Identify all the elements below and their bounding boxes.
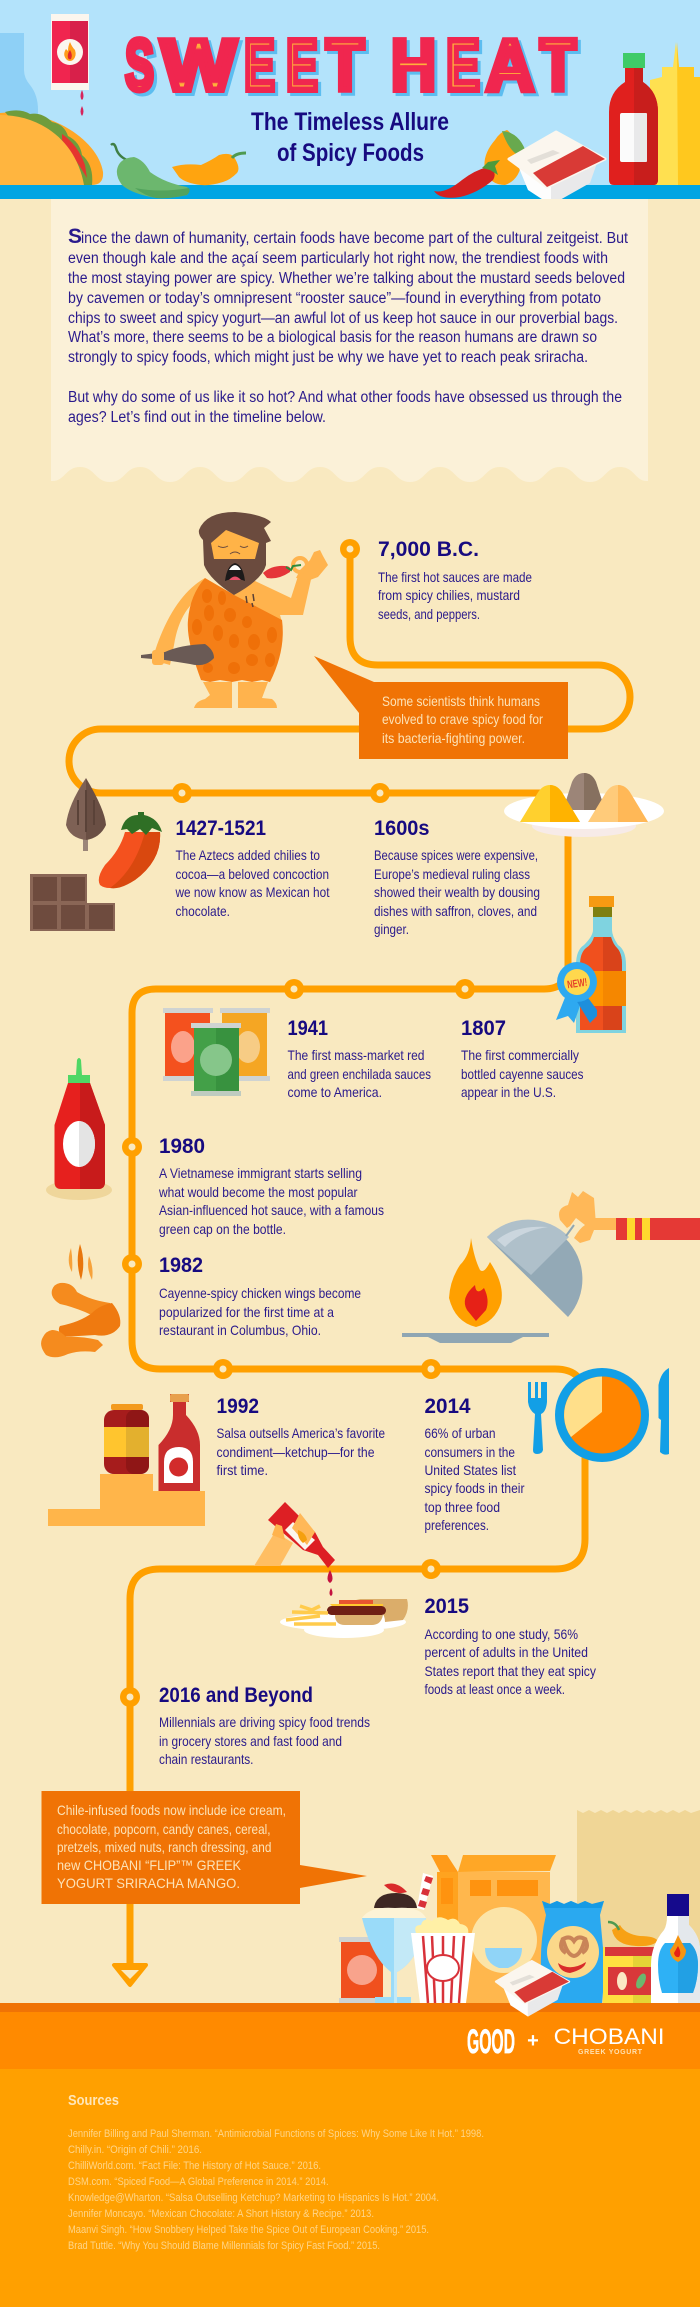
title: E — [247, 29, 278, 109]
icon: salsa and ketchup on steps — [48, 1394, 205, 1526]
icon: cocoa seed — [66, 778, 106, 851]
text block: 1980: Asian-influenced hot sauce, with a famous — [159, 1202, 384, 1218]
callout: chile-infused foods: chocolate, popcorn, candy canes, cereal, — [57, 1821, 270, 1837]
text block: 1992 — [216, 1395, 385, 1478]
sources — [68, 2092, 484, 2252]
text block: 1807: bottled cayenne sauces — [461, 1066, 584, 1082]
text block: 7,000 B.C.: 7,000 B.C. — [378, 538, 479, 561]
text block: 2015: percent of adults in the United — [424, 1644, 588, 1660]
sources: Sources — [68, 2092, 119, 2109]
title: E — [244, 26, 275, 106]
text block: 1980: A Vietnamese immigrant starts selling — [159, 1165, 362, 1181]
callout: bacteria-fighting: evolved to crave spicy food for — [382, 711, 543, 727]
sources: Maanvi Singh. “How Snobbery Helped Take the Spice Out of European Cooking.” 2015. — [68, 2224, 429, 2236]
title: E — [289, 29, 321, 109]
text block: 1980: green cap on the bottle. — [159, 1221, 286, 1237]
text block: 1941 — [288, 1017, 431, 1100]
icon: peanut jar with pepper — [603, 1922, 658, 2003]
callout: chile-infused foods — [42, 1791, 367, 1904]
text block: 1980: 1980 — [159, 1135, 205, 1158]
text block: 1427-1521: chocolate. — [176, 903, 230, 919]
text block: 1992: condiment—ketchup—for the — [216, 1444, 375, 1460]
sources: Chilly.in. “Origin of Chili.” 2016. — [68, 2144, 202, 2156]
callout: bacteria-fighting: Some scientists think humans — [382, 693, 540, 709]
text block: 2015: 2015 — [424, 1595, 469, 1618]
intro text: by cavemen or today’s omnipresent “rooster sauce”—found in everything from potato — [68, 290, 601, 307]
text block: 2014: preferences. — [424, 1517, 489, 1533]
sources: DSM.com. “Spiced Food—A Global Preference in 2014.” 2014. — [68, 2176, 329, 2188]
text block: 1941: come to America. — [288, 1084, 382, 1100]
text block: 1941: and green enchilada sauces — [288, 1066, 431, 1082]
sources: Jennifer Moncayo. “Mexican Chocolate: A Short History & Recipe.” 2013. — [68, 2208, 374, 2220]
title: T — [329, 29, 367, 109]
title: A — [486, 26, 534, 106]
subtitle: of Spicy Foods — [277, 139, 424, 167]
title: T — [543, 29, 579, 109]
intro text: ages? Let’s find out in the timeline below. — [68, 409, 326, 426]
intro text: But why do some of us like it so hot? And what other foods have obsessed us through the — [68, 389, 622, 406]
icon: hot sauce bottle with ribbon — [556, 896, 626, 1033]
text block: 1807: appear in the U.S. — [461, 1084, 556, 1100]
title: E — [244, 26, 275, 106]
title: W — [161, 26, 236, 106]
intro text: chips to sweet and spicy yogurt—an awful lot of us keep hot sauce in our proverbial bags. — [68, 310, 618, 327]
callout: bacteria-fighting: its bacteria-fighting power. — [382, 730, 525, 746]
icon: sriracha bottle — [46, 1058, 112, 1200]
text block: 2015: foods at least once a week. — [424, 1681, 565, 1697]
text block: 1600s: showed their wealth by dousing — [374, 884, 540, 900]
title: W — [164, 29, 239, 109]
logo: Chobani: GREEK YOGURT — [578, 2049, 643, 2056]
icon: pale bottle silhouette — [0, 33, 38, 120]
text block: 2015: States report that they eat spicy — [424, 1663, 596, 1679]
icon: yogurt cup, bottom — [496, 1961, 569, 2017]
intro text: even though kale and the açaí seem particularly hot right now, the trendiest foods with — [68, 250, 608, 267]
text block: 2016 and Beyond: Millennials are driving spicy food trends — [159, 1714, 370, 1730]
callout: bacteria-fighting — [314, 656, 568, 759]
icon: caveman — [141, 512, 328, 708]
text block: 1807 — [461, 1017, 584, 1100]
icon: red chili — [434, 160, 500, 198]
icon: cereal box — [431, 1855, 556, 2003]
icon: red chili pepper — [99, 812, 162, 888]
text block: 1992: Salsa outsells America’s favorite — [216, 1425, 385, 1441]
icon: pretzel bag — [540, 1901, 605, 2003]
text block: 2016 and Beyond: chain restaurants. — [159, 1751, 254, 1767]
icon: ketchup drips — [328, 1570, 332, 1596]
title: T — [540, 26, 576, 106]
text block: 1600s — [374, 817, 540, 937]
text block: 1980 — [158, 1135, 384, 1237]
text block: 1427-1521 — [175, 817, 330, 919]
icon: plate of spices — [504, 773, 664, 837]
text block: 1600s: dishes with saffron, cloves, and — [374, 903, 537, 919]
text block: 1427-1521: cocoa—a beloved concoction — [176, 866, 329, 882]
plus sign: + — [527, 2030, 539, 2052]
icon: knife — [658, 1368, 669, 1455]
icon: hot sauce packet — [51, 14, 89, 116]
icon: yellow mustard bottle — [650, 42, 700, 185]
title: E — [446, 26, 480, 106]
text block: 7,000 B.C.: from spicy chilies, mustard — [378, 587, 520, 603]
title: E — [286, 26, 318, 106]
icon: cloche lifted by hand — [487, 1191, 700, 1317]
title: T — [540, 26, 576, 106]
icon: flame on serving tray — [402, 1238, 549, 1343]
text block: 1992: 1992 — [216, 1395, 259, 1418]
text block: 2016 and Beyond: 2016 and Beyond — [159, 1684, 313, 1707]
text block: 1941: 1941 — [288, 1017, 328, 1040]
text block: 2016 and Beyond — [159, 1684, 370, 1767]
footer bands — [0, 2003, 700, 2307]
text block: 1807: The first commercially — [461, 1047, 579, 1063]
text block: 1427-1521: 1427-1521 — [176, 817, 266, 840]
text block: 2014: United States list — [424, 1462, 516, 1478]
icon: three sauce cans — [163, 1008, 270, 1096]
text block: 7,000 B.C.: The first hot sauces are made — [378, 569, 532, 585]
title: E — [446, 26, 480, 106]
text: GOOD — [467, 2023, 515, 2061]
sources: Jennifer Billing and Paul Sherman. “Antimicrobial Functions of Spices: Why Some Like It Hot.” 1998. — [68, 2128, 484, 2140]
text block: 1982: popularized for the first time at a — [159, 1304, 334, 1320]
text block: 1982 — [159, 1254, 361, 1338]
sources: ChilliWorld.com. “Fact File: The History of Hot Sauce.” 2016. — [68, 2160, 321, 2172]
icon: burger and fries on plate — [280, 1599, 408, 1638]
logo: Chobani: CHOBANI — [554, 2024, 665, 2049]
text block: 2016 and Beyond: in grocery stores and fast food and — [159, 1733, 342, 1749]
title — [125, 26, 579, 109]
title: A — [489, 29, 537, 109]
text block: 2014: 2014 — [424, 1395, 471, 1418]
text block: 2014 — [424, 1395, 525, 1533]
text block: 1992: first time. — [216, 1462, 268, 1478]
icon: ranch bottle — [651, 1894, 700, 2003]
title: W — [161, 26, 236, 106]
icon: steam — [69, 1244, 93, 1280]
icon: popcorn bucket — [411, 1917, 475, 2003]
subtitle — [251, 108, 449, 167]
sources: Brad Tuttle. “Why You Should Blame Millennials for Spicy Fast Food.” 2015. — [68, 2240, 380, 2252]
title: H — [391, 26, 436, 106]
title: H — [394, 29, 439, 109]
arrow: timeline end — [114, 1965, 146, 1985]
title: S — [125, 26, 154, 106]
sources: Knowledge@Wharton. “Salsa Outselling Ketchup? Marketing to Hispanics Is Hot.” 2004. — [68, 2192, 439, 2204]
intro text: ince the dawn of humanity, certain foods have become part of the cultural zeitgeist. But — [81, 230, 629, 247]
callout: chile-infused foods: Chile-infused foods now include ice cream, — [57, 1802, 286, 1818]
icon: chicken wings — [41, 1283, 120, 1357]
text block: 1982: restaurant in Columbus, Ohio. — [159, 1322, 321, 1338]
icon: mango — [484, 130, 527, 185]
text block: 1982: 1982 — [159, 1254, 203, 1277]
icon: green pepper — [111, 144, 190, 198]
title: T — [326, 26, 364, 106]
title: E — [449, 29, 483, 109]
header: sky band — [0, 0, 700, 199]
text block: 1980: what would become the most popular — [158, 1184, 358, 1200]
text block: 2014: spicy foods in their — [424, 1480, 525, 1496]
text block: 7,000 B.C.: seeds, and peppers. — [378, 606, 480, 622]
icon: hand squeezing ketchup — [254, 1502, 335, 1568]
title: A — [486, 26, 534, 106]
title: H — [391, 26, 436, 106]
icon: chocolate bar — [30, 874, 115, 931]
icon: plate pie chart — [555, 1368, 649, 1462]
text block: 2014: consumers in the — [424, 1444, 515, 1460]
text block: 1427-1521: The Aztecs added chilies to — [176, 847, 320, 863]
text block: 1600s: ginger. — [374, 921, 409, 937]
intro text: the most staying power are spicy. Whether we’re talking about the mustard seeds beloved — [68, 270, 625, 287]
callout: chile-infused foods: new CHOBANI “FLIP”™ GREEK — [57, 1857, 242, 1873]
text block: 2014: 66% of urban — [424, 1425, 496, 1441]
timeline path — [69, 549, 630, 1968]
text block: 1982: Cayenne-spicy chicken wings become — [159, 1285, 361, 1301]
intro text: strongly to spicy foods, which might just be why we have yet to reach peak sriracha. — [68, 349, 588, 366]
text block: 1807: 1807 — [461, 1017, 506, 1040]
text block: 2015: According to one study, 56% — [424, 1626, 578, 1642]
callout: chile-infused foods: YOGURT SRIRACHA MANGO. — [57, 1875, 240, 1891]
text block: 7,000 B.C. — [378, 538, 532, 622]
intro text — [68, 225, 629, 426]
intro text: What’s more, there seems to be a biological basis for the reason humans are drawn so — [68, 329, 597, 346]
text block: 1600s: 1600s — [374, 817, 430, 840]
icon: yogurt cup, header — [509, 132, 605, 205]
text block: 1941: The first mass-market red — [288, 1047, 424, 1063]
text block: 2015 — [424, 1595, 596, 1697]
intro text: S — [68, 225, 82, 248]
title: E — [286, 26, 318, 106]
icon: red can — [339, 1937, 383, 2003]
panel: introduction — [51, 199, 648, 482]
timeline nodes — [120, 539, 475, 1707]
title: T — [326, 26, 364, 106]
icon: taco — [0, 110, 103, 185]
subtitle: The Timeless Allure — [251, 108, 449, 136]
icon: ice cream sundae — [362, 1873, 433, 2003]
icon: paper bag backdrop — [577, 1810, 700, 2003]
icon: orange pepper — [172, 153, 246, 185]
title: S — [125, 26, 154, 106]
callout: chile-infused foods: pretzels, mixed nuts, ranch dressing, and — [57, 1839, 271, 1855]
text block: 1427-1521: we now know as Mexican hot — [175, 884, 330, 900]
icon: fork — [528, 1382, 547, 1454]
text block: 1600s: Europe’s medieval ruling class — [374, 866, 530, 882]
icon: hot sauce bottle with ribbon: NEW! — [567, 977, 588, 991]
text block: 2014: top three food — [424, 1499, 500, 1515]
text block: 1600s: Because spices were expensive, — [374, 847, 538, 863]
icon: red hot sauce bottle — [609, 53, 658, 185]
title: S — [128, 29, 157, 109]
